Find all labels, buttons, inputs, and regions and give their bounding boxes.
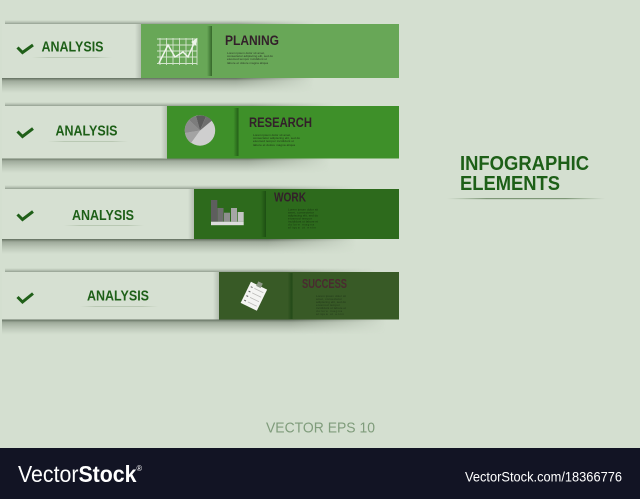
heading: planing: PLANING — [225, 33, 279, 48]
text block: research body: eiusmod tempor incididunt ut — [253, 139, 294, 143]
heading: work: WORK — [274, 191, 306, 205]
icon: check mark — [18, 45, 33, 52]
text block: work body: aliqua ut enim — [288, 226, 316, 230]
text block: planing body: labore et dolore magna aliqua — [227, 61, 268, 65]
caption: vector eps 10: VECTOR EPS 10 — [266, 420, 375, 437]
text block: planing body — [227, 51, 273, 65]
label: analysis: ANALYSIS — [42, 39, 104, 55]
text block: research body — [253, 133, 300, 147]
text block: work body: incididunt ut labore et — [288, 220, 318, 224]
text block: success body: amet, consectetur — [316, 297, 342, 301]
icon: check mark — [18, 128, 33, 136]
footer url: VectorStock.com/18366776 — [465, 470, 622, 484]
label: analysis: ANALYSIS — [56, 124, 118, 140]
text block: planing body: eiusmod tempor incididunt ut — [227, 57, 267, 61]
text block: work body: adipiscing elit, sed do — [288, 214, 318, 218]
text block: work body — [288, 208, 318, 230]
icon: pie chart — [185, 115, 215, 146]
panel: success row — [2, 268, 399, 334]
title: infographic elements: INFOGRAPHIC — [460, 152, 589, 175]
icon: check mark — [18, 212, 33, 220]
text block: work body: amet, consectetur — [288, 210, 314, 214]
text block: success body: eiusmod tempor — [316, 303, 340, 307]
heading: success: SUCCESS — [302, 277, 347, 291]
icon: line chart — [157, 38, 197, 65]
panel: planing row — [2, 20, 399, 93]
text block: work body: dolore magna — [288, 222, 314, 226]
footer band — [0, 448, 640, 499]
text block: planing body: Lorem ipsum dolor sit amet, — [227, 51, 265, 55]
label: analysis: ANALYSIS — [87, 289, 149, 305]
label: analysis: ANALYSIS — [72, 208, 134, 224]
text block: research body: consectetur adipiscing elit, sed do — [253, 136, 300, 140]
panel: work row — [2, 185, 399, 254]
icon: bar chart — [211, 200, 244, 225]
text block: success body: incididunt ut labore et — [316, 306, 346, 310]
text block: planing body: consectetur adipiscing elit, sed do — [227, 54, 273, 58]
text block: success body — [316, 294, 346, 316]
text block: success body: aliqua ut enim — [316, 312, 344, 316]
title: infographic elements: ELEMENTS — [460, 172, 560, 195]
footer logo: VectorStock — [18, 461, 141, 487]
panel: research row — [2, 102, 399, 173]
footer logo: ® — [137, 464, 142, 473]
text block: success body: Lorem ipsum dolor sit — [316, 294, 346, 298]
icon: clipboard — [241, 279, 269, 311]
text block: research body: Lorem ipsum dolor sit amet, — [253, 133, 291, 137]
text block: success body: dolore magna — [316, 309, 342, 313]
text block: work body: Lorem ipsum dolor sit — [288, 208, 318, 212]
text block: success body: adipiscing elit, sed do — [316, 300, 346, 304]
text block: work body: eiusmod tempor — [288, 216, 312, 220]
heading: research: RESEARCH — [249, 115, 312, 130]
title: infographic elements — [447, 152, 605, 199]
icon: check mark — [18, 294, 33, 302]
text block: research body: labore et dolore magna aliqua — [253, 143, 295, 147]
